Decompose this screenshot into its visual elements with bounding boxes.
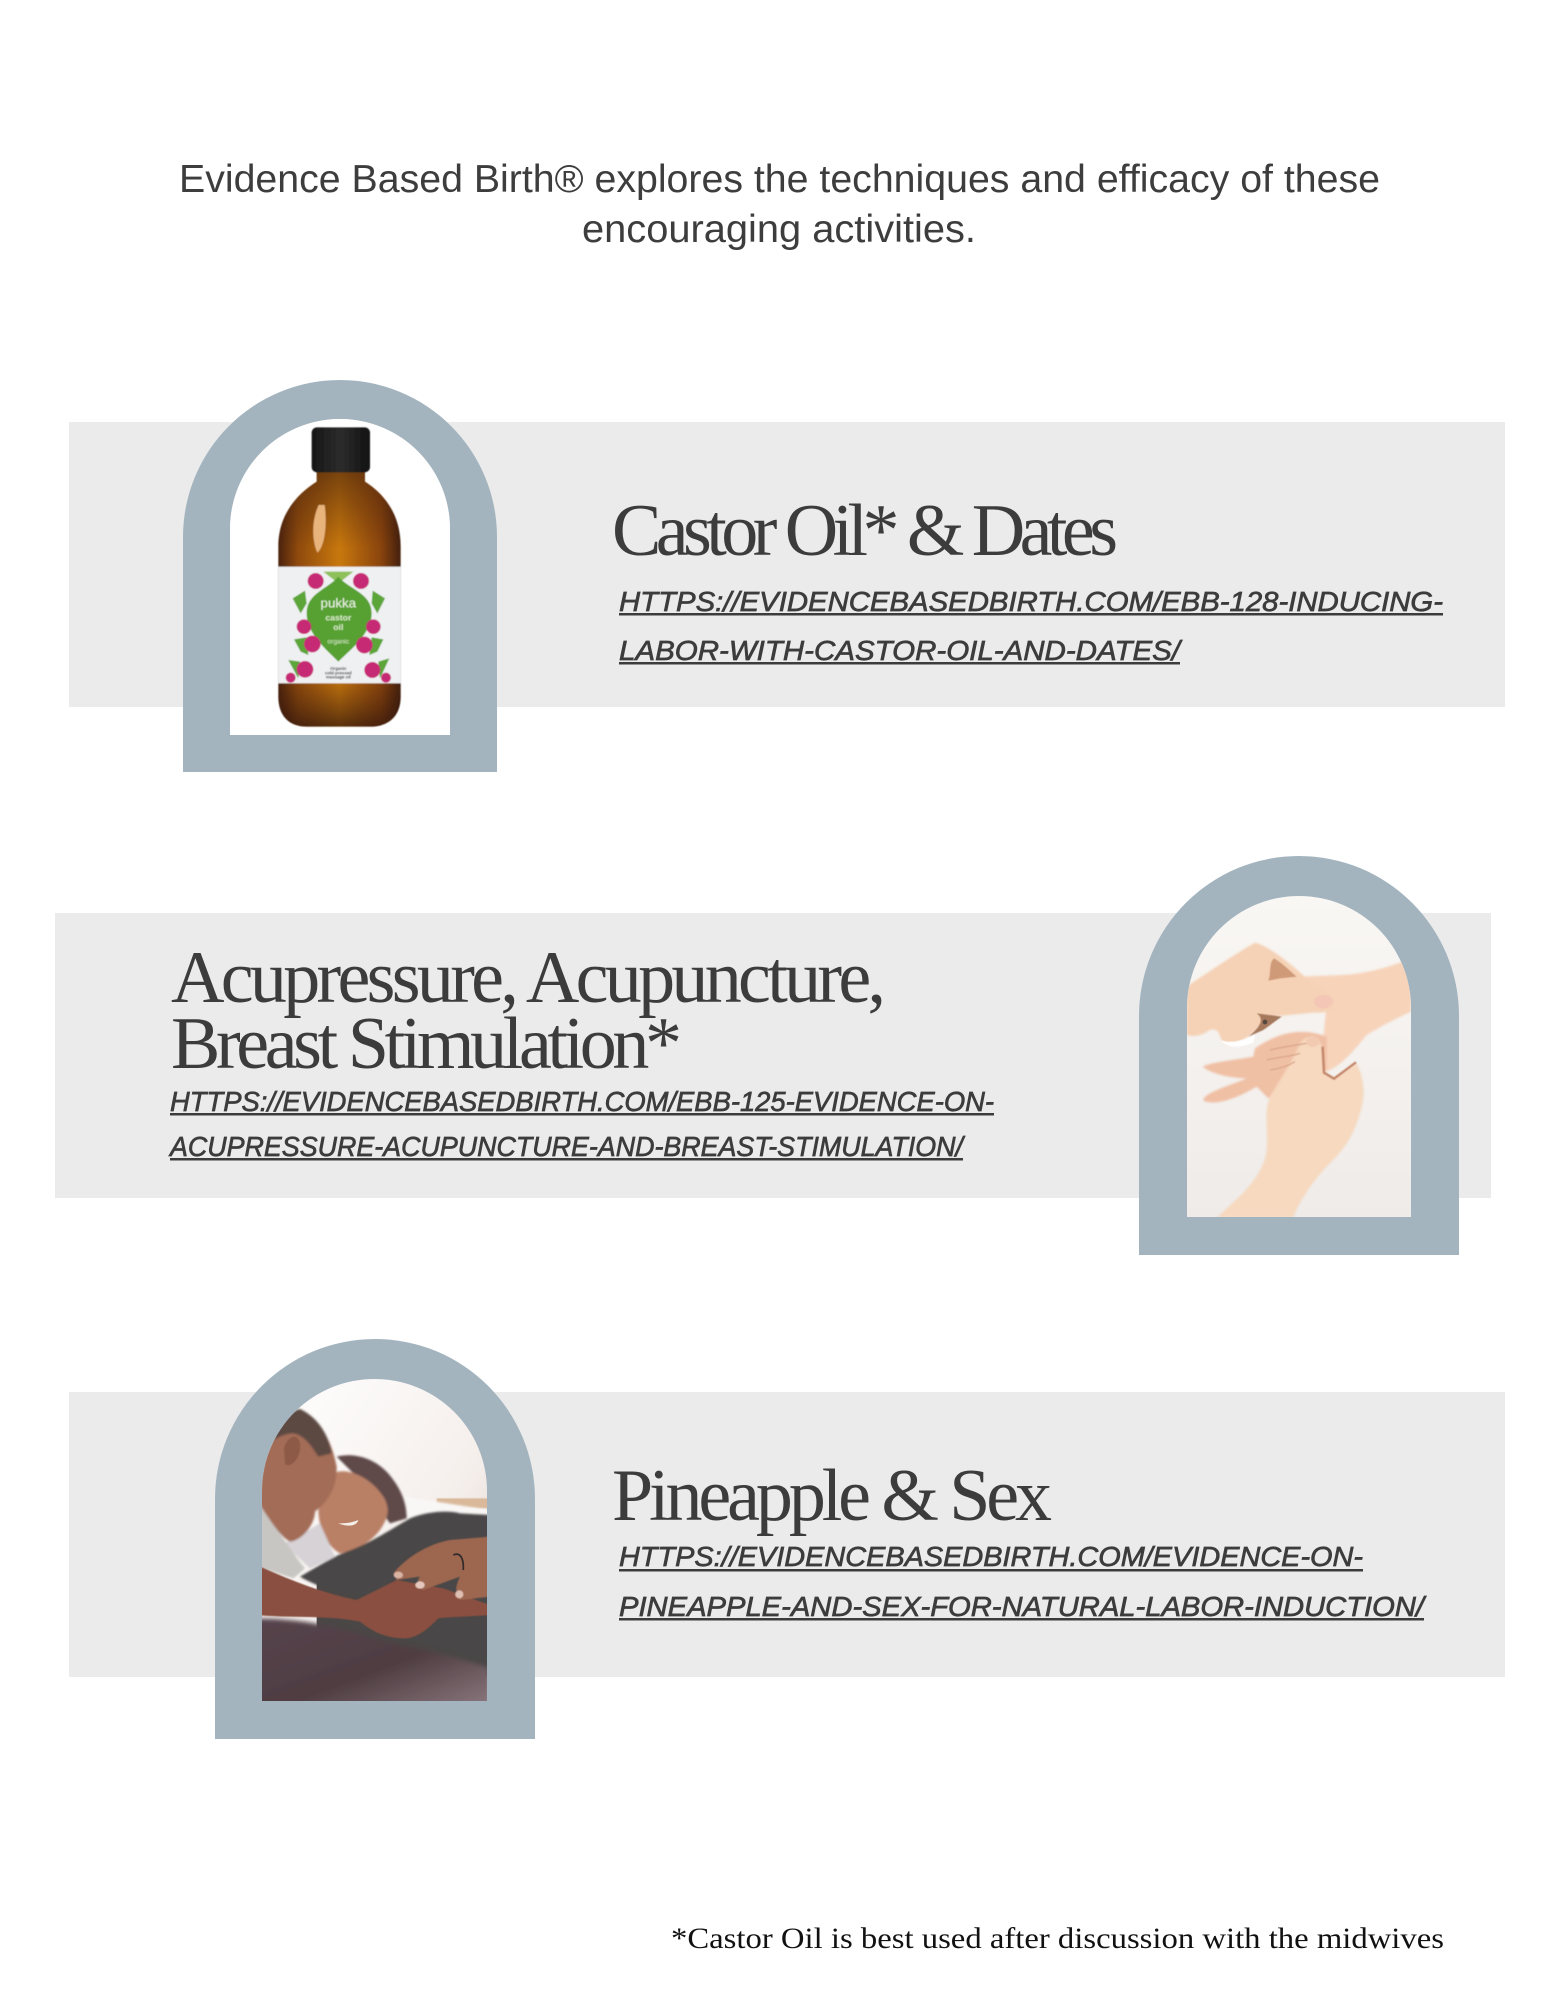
arch frame [1139, 856, 1459, 1255]
link: castor oil and dates: HTTPS://EVIDENCEBASEDBIRTH.COM/EBB-128-INDUCING- [619, 586, 1443, 617]
icon: hands acupressure photo [1187, 896, 1411, 1217]
footnote: *Castor Oil is best used after discussion with the midwives [671, 1922, 1444, 1955]
panel background [69, 422, 1505, 707]
icon: castor oil bottle photo [230, 419, 450, 735]
link: acupressure, acupuncture, breast stimulation: HTTPS://EVIDENCEBASEDBIRTH.COM/EBB-125-EVIDENCE-ON- [170, 1086, 994, 1117]
link: castor oil and dates: LABOR-WITH-CASTOR-OIL-AND-DATES/ [619, 635, 1183, 666]
heading: acupressure, acupuncture, breast stimulation: Acupressure, Acupuncture, [171, 937, 886, 1019]
arch frame [183, 380, 497, 772]
link: pineapple and sex [619, 1541, 1427, 1622]
link: castor oil and dates [619, 586, 1443, 666]
panel: acupressure, acupuncture, breast stimulation [55, 856, 1491, 1255]
icon: castor oil bottle photo: cold-pressed [325, 670, 352, 675]
icon: castor oil bottle photo: oil [333, 622, 343, 632]
panel background [69, 1392, 1505, 1677]
icon: castor oil bottle photo: organic [327, 638, 350, 645]
panel background [55, 913, 1491, 1198]
heading: acupressure, acupuncture, breast stimulation: Breast Stimulation* [171, 1003, 682, 1085]
panel: pineapple and sex [69, 1339, 1505, 1739]
icon: castor oil bottle photo: castor [325, 613, 352, 623]
icon: castor oil bottle photo: Organic [330, 666, 347, 671]
intro text: encouraging activities. [582, 208, 976, 251]
intro text [179, 158, 1380, 251]
heading: castor oil and dates: Castor Oil* & Dates [612, 490, 1118, 572]
heading: acupressure, acupuncture, breast stimulation [171, 937, 886, 1085]
panel: castor oil and dates [69, 380, 1505, 772]
icon: castor oil bottle photo: pukka [321, 595, 357, 610]
heading: pineapple and sex: Pineapple & Sex [612, 1455, 1052, 1537]
link: acupressure, acupuncture, breast stimulation: ACUPRESSURE-ACUPUNCTURE-AND-BREAST-STIMULATION/ [168, 1131, 966, 1162]
intro text: Evidence Based Birth® explores the techniques and efficacy of these [179, 158, 1380, 201]
arch frame [215, 1339, 535, 1739]
icon: castor oil bottle photo: massage oil [326, 675, 351, 680]
icon: couple photo [257, 1379, 490, 1707]
link: acupressure, acupuncture, breast stimulation [168, 1086, 994, 1162]
link: pineapple and sex: HTTPS://EVIDENCEBASEDBIRTH.COM/EVIDENCE-ON- [619, 1541, 1363, 1572]
link: pineapple and sex: PINEAPPLE-AND-SEX-FOR-NATURAL-LABOR-INDUCTION/ [619, 1591, 1427, 1622]
